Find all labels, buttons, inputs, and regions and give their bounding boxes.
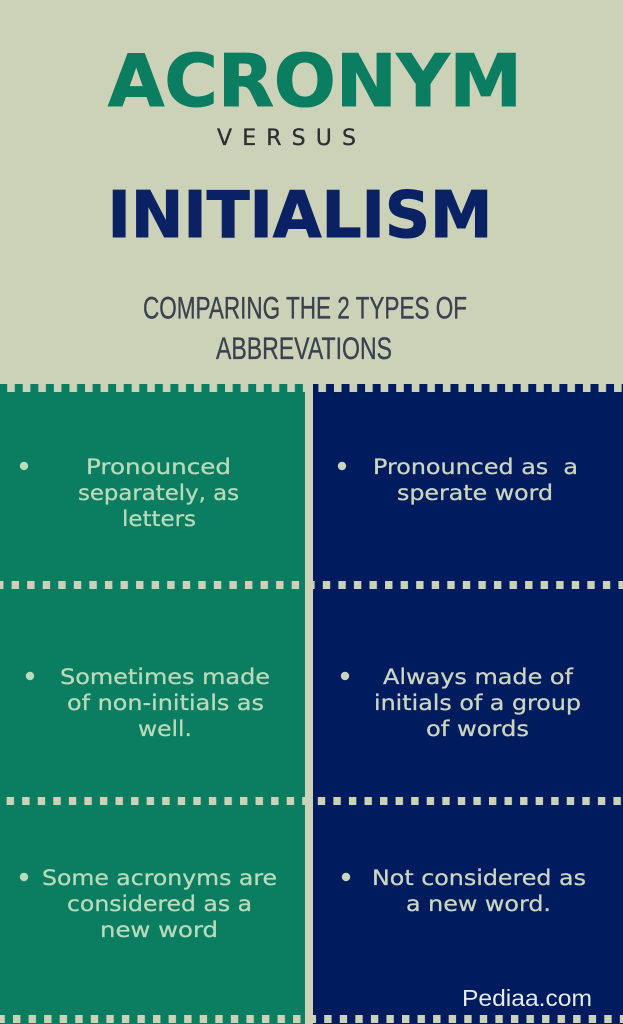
acronym row 3: new word (100, 918, 218, 943)
acronym row 1: separately, as (78, 481, 239, 506)
panel: initialism column (313, 384, 623, 1024)
subtitle: ABBREVATIONS (216, 330, 392, 366)
panel: acronym column (0, 384, 305, 1024)
initialism row 1: sperate word (397, 481, 553, 506)
acronym row 2: Sometimes made (60, 665, 270, 690)
acronym row 2 (26, 665, 270, 742)
initialism row 2: initials of a group (374, 691, 581, 716)
acronym row 3: Some acronyms are (42, 866, 277, 891)
title: acronym: ACRONYM (108, 40, 522, 124)
acronym row 1 (20, 455, 239, 532)
acronym row 3 (20, 866, 277, 943)
subtitle (143, 290, 467, 366)
initialism row 2 (341, 665, 581, 742)
initialism row 2: of words (426, 717, 529, 742)
acronym row 2: of non-initials as (67, 691, 264, 716)
initialism row 1 (338, 455, 578, 506)
acronym row 1: letters (122, 507, 196, 532)
acronym row 3: considered as a (67, 892, 252, 917)
title: initialism: INITIALISM (108, 179, 492, 253)
initialism row 3 (342, 866, 586, 917)
initialism row 2: Always made of (383, 665, 573, 690)
initialism row 3: a new word. (406, 892, 551, 917)
source credit: Pediaa.com (462, 985, 592, 1011)
versus label: VERSUS (217, 126, 356, 151)
acronym row 2: well. (138, 717, 192, 742)
initialism row 3: Not considered as (372, 866, 586, 891)
acronym row 1: Pronounced (86, 455, 231, 480)
subtitle: COMPARING THE 2 TYPES OF (143, 290, 467, 326)
initialism row 1: Pronounced as a (373, 455, 578, 480)
